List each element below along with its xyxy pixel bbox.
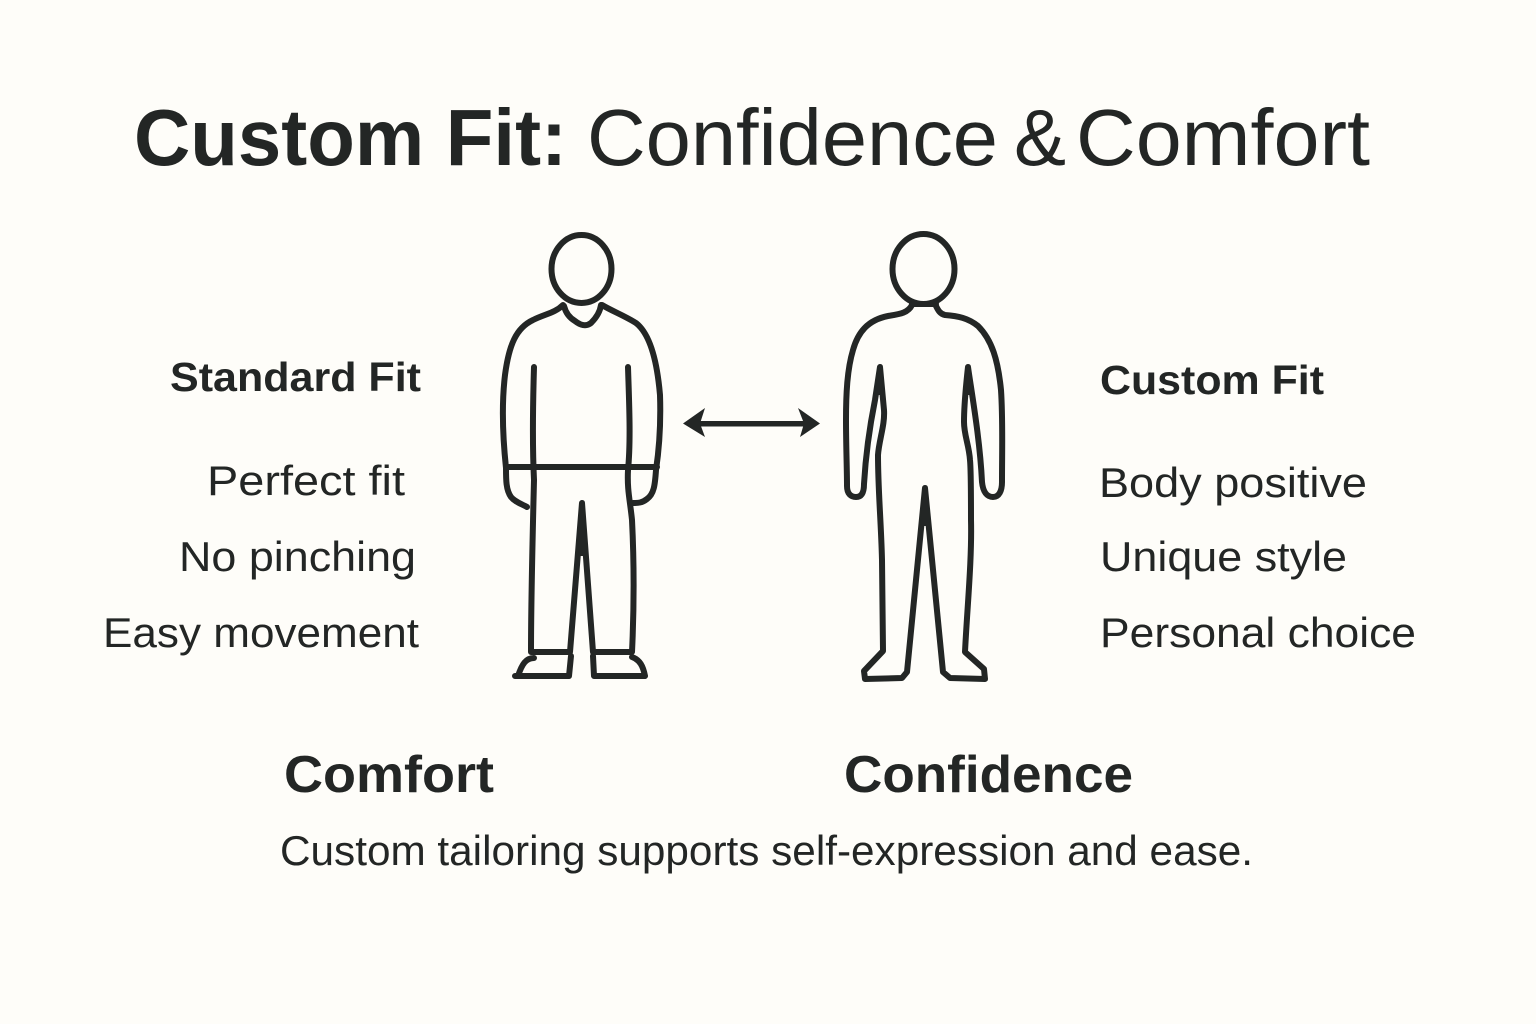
hem [507, 464, 657, 470]
crotch taper [578, 503, 586, 556]
head [552, 235, 612, 303]
body outline [846, 305, 1002, 679]
crotch taper [920, 488, 930, 526]
text: perfect fit: Perfect fit [207, 457, 405, 504]
label: confidence: Confidence [844, 746, 1133, 804]
text: unique style: Unique style [1100, 533, 1347, 580]
left shoe [515, 656, 571, 676]
title: & [1014, 93, 1066, 182]
arrow: double-headed [683, 408, 820, 437]
title: Comfort [1076, 93, 1370, 182]
arm gap tapers [875, 367, 973, 395]
title: Confidence [587, 93, 998, 182]
sweater and arms [503, 305, 563, 507]
text: easy movement: Easy movement [103, 609, 419, 656]
panel: custom fit text [1099, 357, 1416, 656]
title [134, 93, 1370, 182]
left side and leg [531, 367, 634, 652]
right shoe [593, 656, 645, 676]
panel: standard fit text [103, 354, 421, 656]
heading: standard fit: Standard Fit [170, 354, 421, 400]
icon: custom fit figure [846, 234, 1002, 679]
collar [564, 305, 601, 325]
heading: custom fit: Custom Fit [1100, 357, 1324, 403]
head [892, 234, 954, 304]
text: body positive: Body positive [1099, 459, 1367, 506]
icon: standard fit figure [503, 235, 660, 676]
caption: Custom tailoring supports self-expression and ease. [280, 827, 1253, 874]
neck [912, 301, 936, 307]
label: comfort: Comfort [284, 746, 494, 804]
text: personal choice: Personal choice [1100, 609, 1416, 656]
title: Custom Fit: [134, 93, 567, 182]
text: no pinching: No pinching [179, 533, 416, 580]
